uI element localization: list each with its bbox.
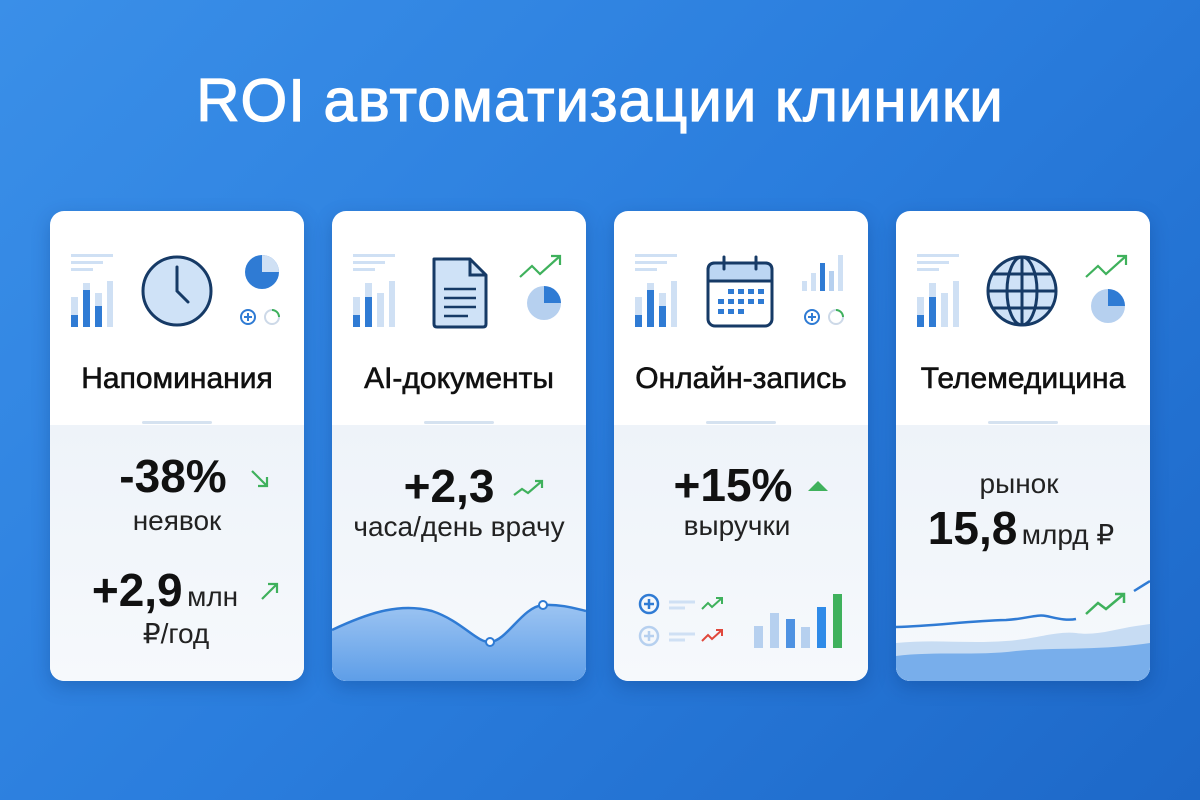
stat: +2,3: +2,3 (404, 460, 494, 512)
panel: Телемедицина (896, 211, 1150, 681)
panel: AI-документы (332, 211, 586, 681)
icons row (71, 254, 280, 327)
panel: Напоминания: неявок (133, 505, 221, 536)
panel: AI-документы: AI-документы (364, 362, 554, 395)
heading: Напоминания (81, 362, 273, 395)
panel: Онлайн-запись (614, 211, 868, 681)
icon: mini bars (802, 255, 843, 291)
panel: Напоминания: ₽/год (143, 618, 209, 649)
icon: globe (988, 257, 1056, 325)
stat: +15%: +15% (674, 459, 792, 511)
legend and bar chart (638, 594, 842, 648)
panel: Напоминания (50, 211, 304, 681)
panel: Онлайн-запись: выручки (684, 510, 790, 541)
icon: trend (520, 256, 560, 277)
icon: pie (245, 255, 279, 289)
icon: clock (143, 257, 211, 325)
panel: Телемедицина: Телемедицина (921, 362, 1125, 395)
panel: AI-документы: часа/день врачу (353, 511, 565, 542)
chart: area wave (332, 600, 586, 681)
panel: Телемедицина: 15,8 млрд ₽ (928, 502, 1114, 554)
icon: calendar (708, 257, 772, 326)
chart: market trend (896, 580, 1150, 681)
title: ROI автоматизации клиники (196, 67, 1004, 134)
stat: +2,9: +2,9 млн (92, 564, 238, 616)
stat: рынок 15,8 млрд ₽: рынок (980, 468, 1058, 499)
icon: document (434, 259, 486, 327)
arrows (251, 470, 278, 600)
panel: Онлайн-запись: Онлайн-запись (635, 362, 847, 395)
stat: -38%: -38% (119, 450, 227, 502)
